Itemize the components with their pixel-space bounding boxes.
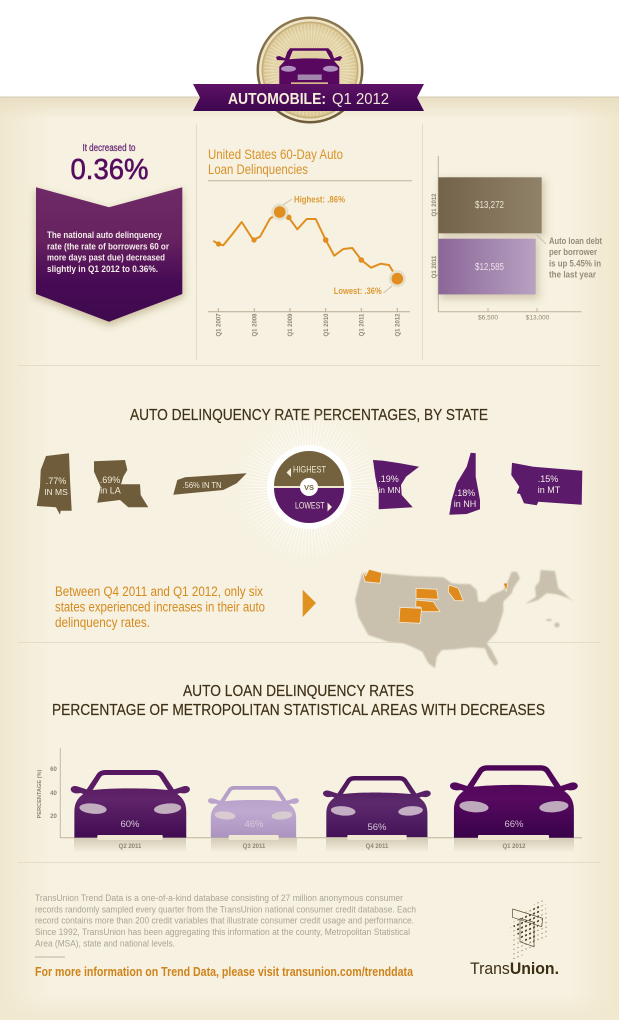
sunburst comparison badge bbox=[249, 427, 369, 547]
callout: debt growth: the last year bbox=[549, 270, 596, 280]
lowest marker bbox=[334, 270, 406, 296]
bar axis labels bbox=[432, 193, 550, 322]
y axis labels: PERCENTAGE (%) bbox=[37, 770, 43, 818]
state: New Hampshire: .18% bbox=[455, 488, 475, 498]
bar: Q1 2012 bbox=[438, 177, 542, 233]
text block: six states: states experienced increases in their auto bbox=[55, 600, 265, 614]
state: Tennessee: .56% IN TN bbox=[182, 480, 222, 490]
car: Q3 2011 bbox=[208, 786, 299, 850]
callout: debt growth: Auto loan debt bbox=[549, 236, 602, 246]
lowest half: LOWEST bbox=[295, 500, 325, 510]
state: New Hampshire bbox=[449, 453, 480, 515]
header medallion and banner bbox=[193, 16, 424, 124]
chevron text: The national auto delinquency bbox=[47, 230, 163, 240]
footer description: Since 1992, TransUnion has been aggregating this information at the county, Metropolitan Statistical bbox=[35, 927, 410, 937]
logo wordmark: TransUnion. bbox=[470, 959, 559, 978]
y axis labels: 40 bbox=[50, 791, 57, 797]
map of United States bbox=[355, 569, 573, 668]
bar axis labels: Q1 2012 bbox=[432, 193, 438, 217]
highest marker bbox=[271, 194, 345, 220]
panel: loan debt bar chart bbox=[432, 156, 602, 322]
chevron panel bbox=[36, 187, 182, 322]
bar axis labels: $13,000 bbox=[526, 314, 550, 322]
footer description: TransUnion Trend Data is a one-of-a-kind database consisting of 27 million anonymous consumer bbox=[35, 893, 403, 903]
reflections bbox=[74, 838, 574, 852]
text block: six states: delinquency rates. bbox=[55, 615, 150, 630]
callout: debt growth bbox=[537, 235, 602, 280]
bar: Q1 2012: $13,272 bbox=[475, 200, 504, 211]
state: Montana: in MT bbox=[538, 485, 561, 495]
car: Q1 2012 bbox=[450, 765, 578, 850]
logo mark bbox=[510, 895, 548, 962]
bar axis labels: $6,500 bbox=[478, 314, 498, 322]
state: Louisiana bbox=[94, 460, 148, 507]
highest half: HIGHEST bbox=[293, 464, 326, 474]
panel: line chart of 60-day delinquencies bbox=[208, 146, 412, 337]
map outline bbox=[355, 572, 520, 668]
footer description: records randomly sampled every quarter from the TransUnion national consumer credit database. Each bbox=[35, 904, 416, 914]
arrow bbox=[303, 590, 316, 617]
data line bbox=[214, 212, 397, 279]
banner ribbon bbox=[193, 84, 424, 111]
state: Minnesota bbox=[373, 460, 419, 509]
car: Q2 2011: Q2 2011 bbox=[119, 844, 142, 850]
panel: national rate bbox=[34, 143, 184, 326]
axis labels: Q1 2010 bbox=[324, 313, 330, 337]
big number: 0.36% bbox=[70, 154, 148, 186]
state: Louisiana: in LA bbox=[100, 486, 121, 496]
lead-in text: It decreased to bbox=[82, 143, 136, 154]
bar: Q1 2011 bbox=[438, 239, 536, 294]
heading: metropolitan areas: AUTO LOAN DELINQUENCY RATES bbox=[183, 683, 414, 700]
axis labels: Q1 2007 bbox=[216, 313, 222, 337]
section dividers bbox=[18, 124, 600, 862]
medallion bbox=[256, 16, 364, 124]
y axis labels: 60 bbox=[50, 767, 57, 773]
bar shadows bbox=[440, 179, 545, 299]
callout: debt growth: per borrower bbox=[549, 247, 597, 257]
axis labels: Q1 2009 bbox=[288, 313, 294, 337]
chart title: Loan Delinquencies bbox=[208, 161, 308, 177]
TransUnion logo bbox=[470, 895, 559, 978]
chevron text bbox=[47, 230, 169, 274]
footer description bbox=[35, 893, 416, 948]
car: Q4 2011: 56% bbox=[367, 822, 387, 833]
state: Montana: .15% bbox=[538, 474, 558, 484]
chart title bbox=[208, 146, 343, 177]
state: Mississippi: .77% bbox=[46, 476, 66, 486]
bar: Q1 2011: $12,585 bbox=[475, 262, 504, 273]
text block: six states: Between Q4 2011 and Q1 2012, only six bbox=[55, 584, 263, 599]
chevron text: slightly in Q1 2012 to 0.36%. bbox=[47, 264, 158, 274]
axis bbox=[208, 308, 410, 312]
car: Q1 2012: 66% bbox=[504, 819, 524, 830]
axis labels: Q1 2011 bbox=[360, 313, 366, 336]
text block: six states bbox=[55, 584, 265, 630]
axis labels: Q1 2012 bbox=[396, 313, 402, 337]
highest marker: Highest: .86% bbox=[294, 194, 345, 204]
vs circle: VS bbox=[304, 483, 314, 492]
Alaska and Hawaii bbox=[525, 570, 573, 628]
axis labels bbox=[216, 313, 402, 337]
chevron text: more days past due) decreased bbox=[47, 253, 165, 263]
banner title: AUTOMOBILE: bbox=[228, 91, 326, 108]
footer link text: For more information on Trend Data, please visit transunion.com/trenddata bbox=[35, 965, 414, 979]
state: Tennessee bbox=[173, 473, 247, 495]
car: Q2 2011: 60% bbox=[120, 819, 140, 830]
chevron text: rate (the rate of borrowers 60 or bbox=[47, 241, 169, 251]
car: Q4 2011: Q4 2011 bbox=[366, 844, 389, 850]
car: Q2 2011 bbox=[71, 770, 190, 850]
heading: metropolitan areas: PERCENTAGE OF METROPOLITAN STATISTICAL AREAS WITH DECREASES bbox=[52, 702, 545, 719]
state: New Hampshire: in NH bbox=[454, 499, 476, 509]
axis labels: Q1 2008 bbox=[252, 313, 258, 337]
state: Minnesota: in MN bbox=[378, 485, 401, 495]
bar axes bbox=[438, 156, 582, 312]
footer description: Area (MSA), state and national levels. bbox=[35, 938, 175, 948]
y axis labels: 20 bbox=[50, 814, 57, 820]
bar axis labels: Q1 2011 bbox=[432, 255, 438, 278]
car: Q1 2012: Q1 2012 bbox=[502, 844, 526, 850]
icon: car bbox=[276, 48, 342, 85]
heading: delinquency by state: AUTO DELINQUENCY RATE PERCENTAGES, BY STATE bbox=[130, 407, 488, 424]
state: Montana bbox=[511, 463, 582, 505]
footer description: record contains more than 200 credit variables that illustrate consumer credit usage and performance. bbox=[35, 916, 414, 926]
banner date: Q1 2012 bbox=[332, 91, 389, 108]
data markers bbox=[216, 214, 364, 263]
car: Q3 2011: Q3 2011 bbox=[243, 844, 266, 850]
state: Minnesota: .19% bbox=[378, 474, 399, 484]
chart: car pictogram bars bbox=[37, 748, 582, 852]
state: Mississippi bbox=[37, 453, 72, 515]
chevron shadow bbox=[34, 190, 184, 326]
callout: debt growth: is up 5.45% in bbox=[549, 258, 601, 268]
state: Louisiana: .69% bbox=[100, 475, 120, 485]
heading: metropolitan areas bbox=[52, 683, 545, 719]
y axis labels bbox=[37, 767, 57, 820]
highlighted states bbox=[362, 569, 508, 623]
car: Q4 2011 bbox=[323, 776, 431, 850]
chart title: United States 60-Day Auto bbox=[208, 146, 343, 162]
lowest marker: Lowest: .36% bbox=[334, 286, 382, 296]
state: Mississippi: IN MS bbox=[44, 487, 68, 497]
car: Q3 2011: 46% bbox=[244, 819, 264, 830]
